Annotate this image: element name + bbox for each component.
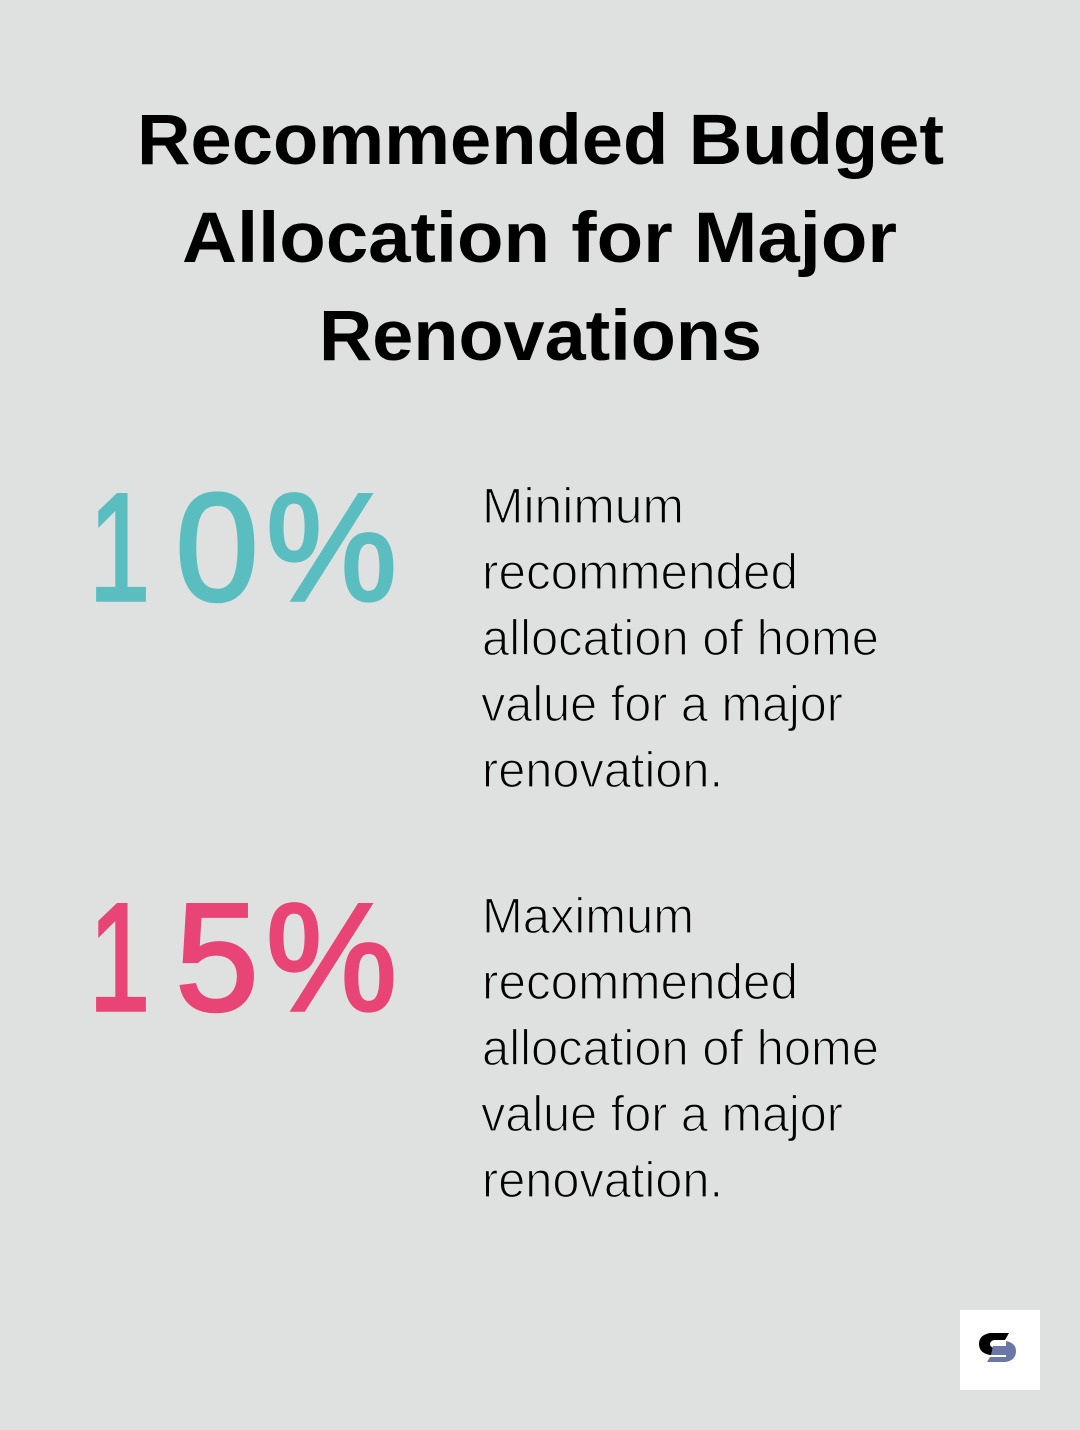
text block: minimum allocation: value for a major <box>481 676 843 732</box>
text block: minimum allocation: allocation of home <box>482 610 879 666</box>
stat: 10%: % <box>266 462 397 633</box>
title: Recommended Budget <box>137 101 944 180</box>
stat: 15%: 5 <box>176 872 258 1043</box>
text block: maximum allocation: Maximum <box>482 888 694 944</box>
stat: 15%: 1 <box>89 872 150 1043</box>
stat: 15% <box>89 872 397 1043</box>
title <box>137 101 944 376</box>
text block: maximum allocation: value for a major <box>481 1086 843 1142</box>
title: Renovations <box>319 297 762 376</box>
text block: minimum allocation: renovation. <box>482 742 723 798</box>
text block: maximum allocation: recommended <box>482 954 798 1010</box>
text block: maximum allocation: allocation of home <box>482 1020 879 1076</box>
text block: maximum allocation <box>481 888 879 1208</box>
stat: 15%: % <box>266 872 397 1043</box>
title: Allocation for Major <box>182 199 897 278</box>
text block: minimum allocation: recommended <box>482 544 798 600</box>
text block: minimum allocation <box>481 478 879 798</box>
text block: maximum allocation: renovation. <box>482 1152 723 1208</box>
stat: 10%: 1 <box>89 462 150 633</box>
stat: 10% <box>89 462 397 633</box>
stat: 10%: 0 <box>176 462 258 633</box>
text block: minimum allocation: Minimum <box>482 478 684 534</box>
logo badge <box>960 1310 1040 1390</box>
